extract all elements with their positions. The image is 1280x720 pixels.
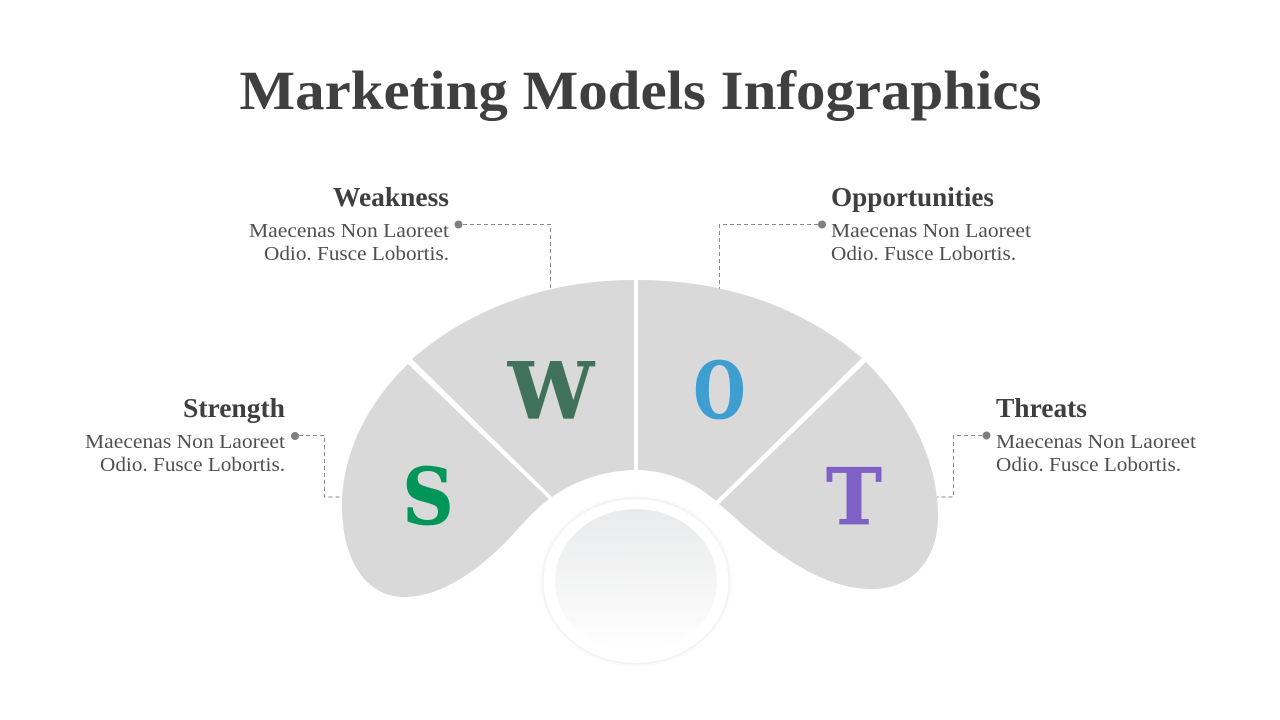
- panel: opportunities segment: [638, 280, 862, 501]
- panel: threats segment: [719, 362, 938, 589]
- text block: weakness: Weakness: [333, 182, 449, 212]
- panel: strength segment: [342, 364, 549, 597]
- text block: opportunities: Opportunities: [831, 182, 994, 212]
- center circle: [544, 499, 728, 663]
- connector: opportunities: [720, 220, 826, 289]
- letter: W: W: [507, 345, 595, 437]
- connector: weakness: [454, 220, 550, 289]
- text block: threats: Threats: [996, 393, 1087, 423]
- text block: threats: Odio. Fusce Lobortis.: [996, 454, 1181, 476]
- letter: O: O: [694, 346, 745, 437]
- letter: T: T: [826, 452, 882, 543]
- text block: opportunities: Odio. Fusce Lobortis.: [831, 243, 1016, 265]
- text block: opportunities: [831, 182, 1031, 265]
- text block: threats: Maecenas Non Laoreet: [996, 431, 1196, 453]
- connector: strength: [291, 432, 343, 497]
- letter: S: S: [402, 451, 454, 543]
- text block: threats: [996, 393, 1196, 476]
- text block: weakness: Odio. Fusce Lobortis.: [264, 243, 449, 265]
- panel: weakness segment: [412, 280, 634, 497]
- title: Marketing Models Infographics: [240, 60, 1042, 121]
- text block: strength: Odio. Fusce Lobortis.: [100, 454, 285, 476]
- text block: weakness: Maecenas Non Laoreet: [249, 220, 449, 242]
- connector: threats: [937, 432, 990, 497]
- text block: strength: Strength: [183, 393, 285, 423]
- text block: strength: Maecenas Non Laoreet: [85, 431, 285, 453]
- text block: strength: [85, 393, 285, 476]
- text block: opportunities: Maecenas Non Laoreet: [831, 220, 1031, 242]
- text block: weakness: [249, 182, 449, 265]
